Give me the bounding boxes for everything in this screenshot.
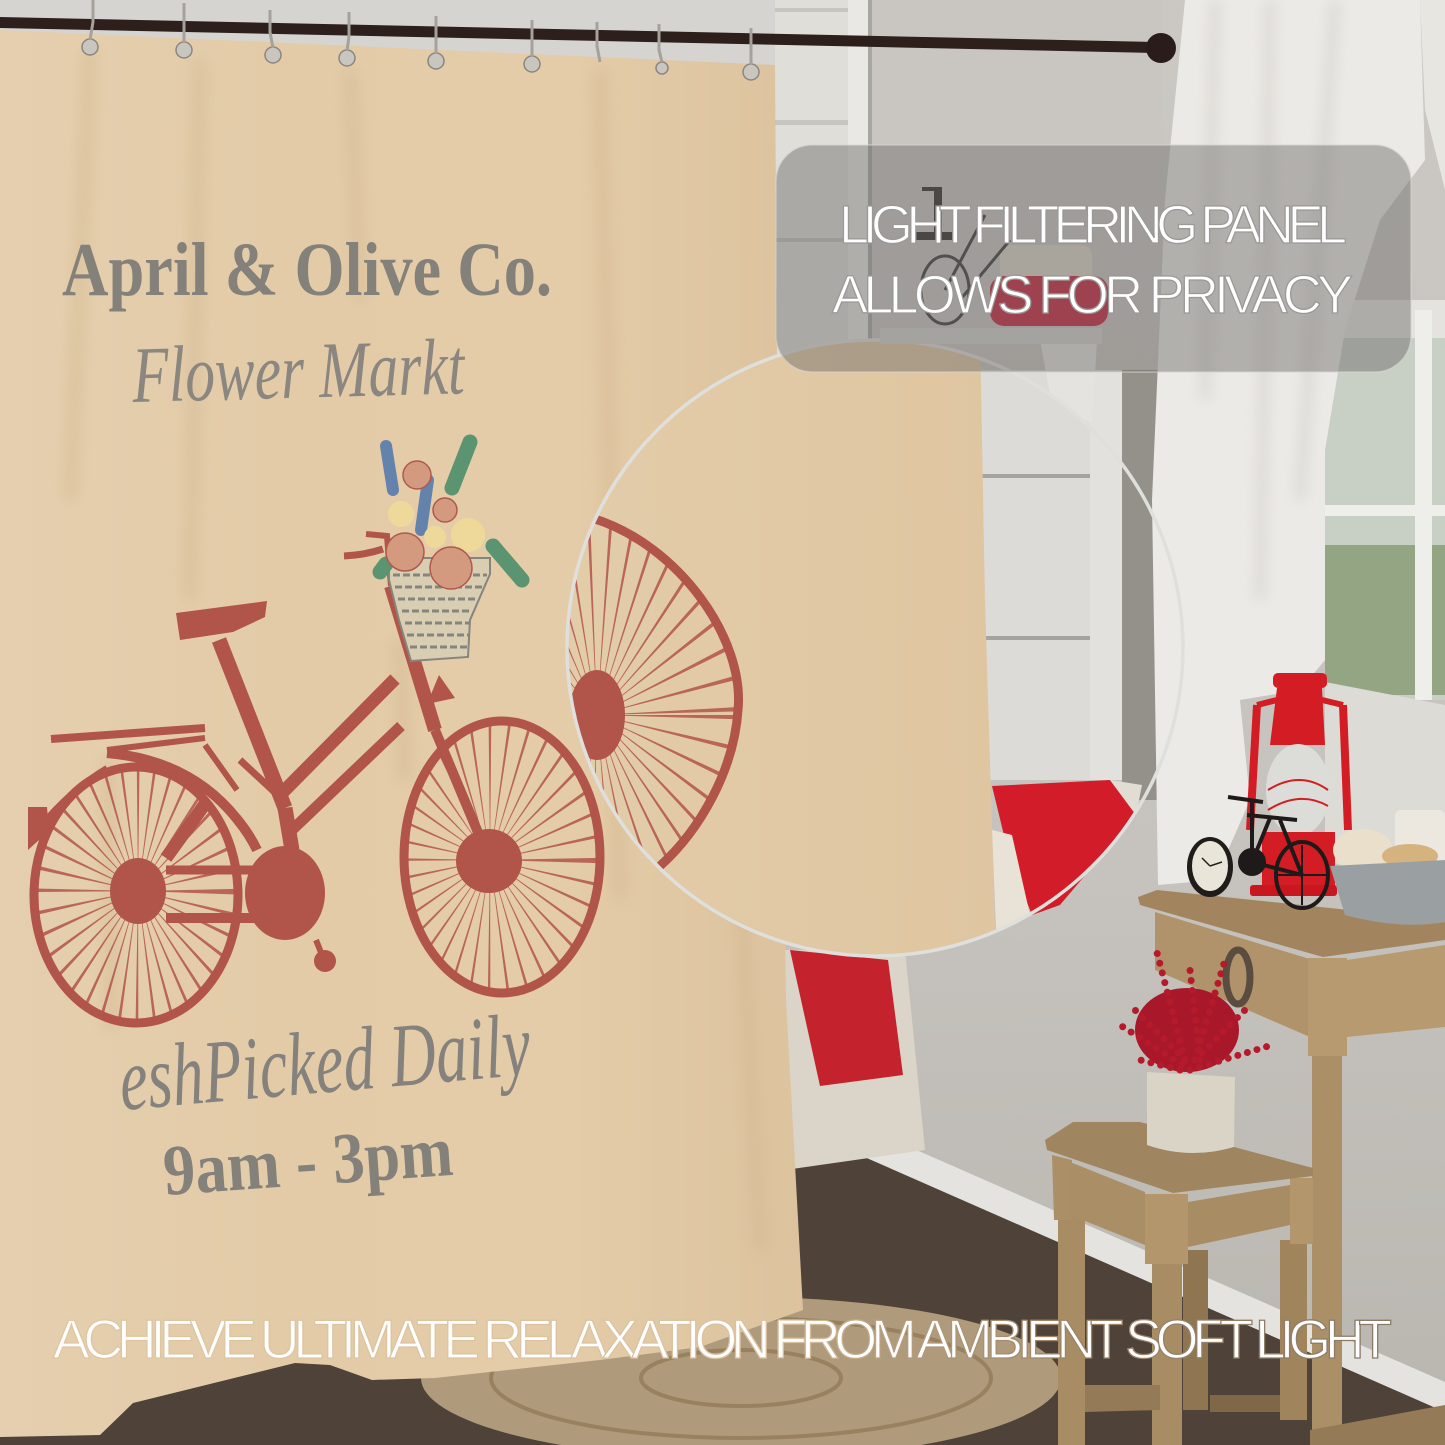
mini metal bicycle <box>1228 797 1328 908</box>
table top <box>1138 890 1445 957</box>
curtain print: brand heading: April & Olive Co. <box>62 228 552 312</box>
callout line 1: LIGHT FILTERING PANEL <box>839 195 1347 255</box>
zoomed wheel <box>568 516 743 870</box>
curtain print: fresh picked daily script: eshPicked Daily <box>115 995 534 1130</box>
magnifier circle showing fabric detail <box>522 330 1183 960</box>
berry sprigs <box>1120 945 1272 1070</box>
zoomed curtain fabric <box>605 342 995 954</box>
basket <box>389 558 490 661</box>
desk clock <box>1187 837 1233 897</box>
frame <box>40 534 482 960</box>
shelf with decor behind panel <box>880 187 1108 344</box>
bottom caption: ACHIEVE ULTIMATE RELAXATION FROM AMBIENT SOFT LIGHT <box>53 1308 1392 1370</box>
drawer front <box>1155 912 1313 1037</box>
flower basket <box>380 442 522 661</box>
shower curtain panel <box>0 30 803 1437</box>
drawer pull <box>1226 950 1250 1004</box>
floor <box>0 1155 1445 1445</box>
brake lever <box>427 675 455 704</box>
pink flowers <box>386 461 472 589</box>
pedal <box>314 950 336 972</box>
small wooden stool <box>1045 1122 1445 1445</box>
turned table leg <box>1312 1050 1342 1445</box>
curtain print: hours: 9am - 3pm <box>161 1111 455 1211</box>
callout panel <box>776 145 1411 372</box>
apron <box>1347 945 1445 1037</box>
window <box>1325 300 1445 900</box>
shiplap wall and door frame <box>980 340 1172 800</box>
red berry plant in birch pot <box>1120 945 1272 1153</box>
saddle <box>176 601 267 640</box>
hooks and grommets <box>82 0 759 80</box>
translucent panel <box>776 145 1411 372</box>
blue flowers <box>386 446 428 530</box>
callout line 2: ALLOWS FOR PRIVACY <box>832 265 1353 325</box>
yellow flowers <box>388 501 485 552</box>
rear mudguard <box>28 807 49 850</box>
berry mass <box>1135 988 1239 1072</box>
blanket and red towels <box>780 780 1142 1170</box>
white sheer window curtain <box>1152 0 1445 885</box>
rear wheel <box>34 767 238 1023</box>
red lantern <box>1250 673 1348 896</box>
front wheel <box>404 721 600 993</box>
birch pot <box>1147 1072 1235 1153</box>
side table with drawer <box>1138 890 1445 1445</box>
jute rug <box>421 1297 1061 1445</box>
table top decor <box>1187 673 1445 925</box>
baseboard <box>860 1145 1445 1412</box>
curtain print: flower market script: Flower Markt <box>130 323 467 420</box>
printed bicycle <box>28 534 600 1023</box>
green leaves <box>380 442 522 580</box>
galvanized tin with soaps <box>1330 810 1445 925</box>
chainring <box>245 846 325 940</box>
curtain rod with hooks <box>0 0 1176 80</box>
table corner post <box>1308 958 1347 1056</box>
